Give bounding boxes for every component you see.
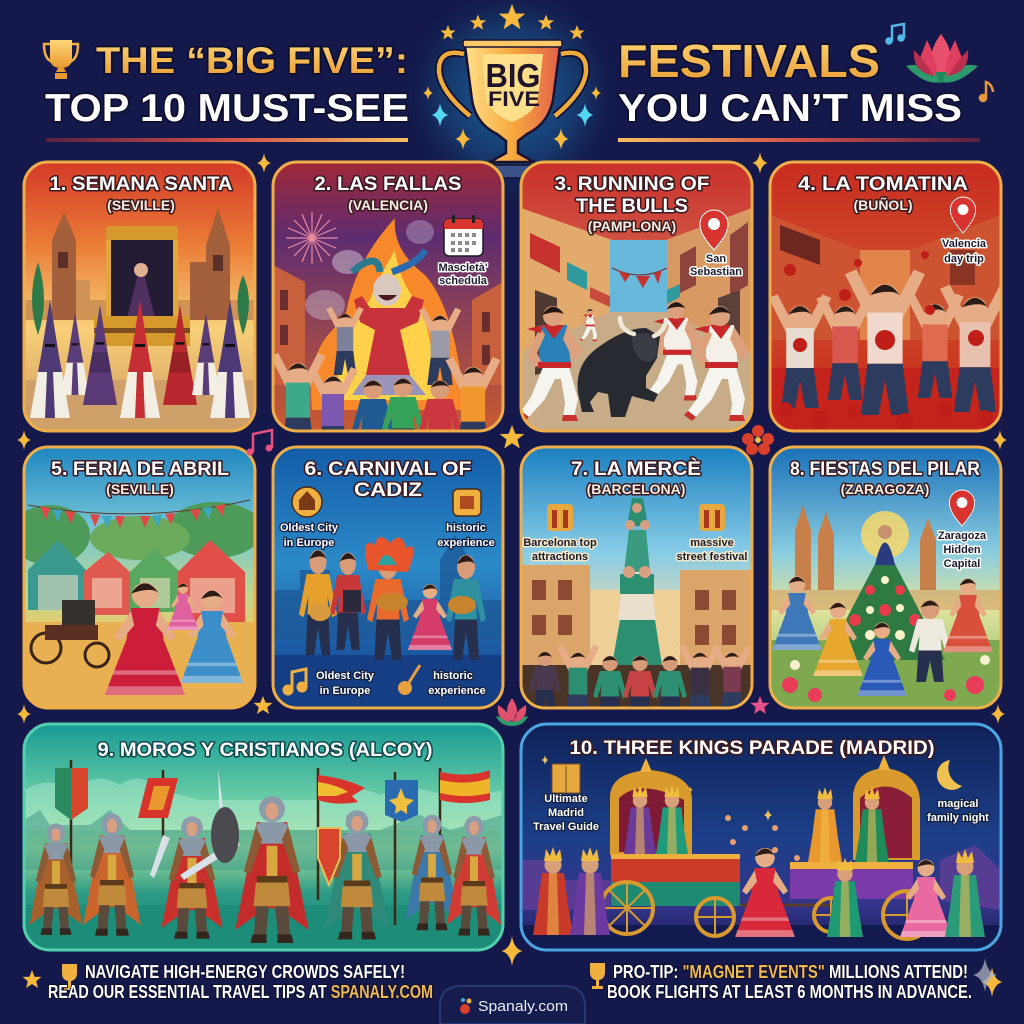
icon: crescent moon [937,760,962,790]
scene: human tower [521,447,752,722]
runners [580,309,598,341]
scene: street and bull [517,162,752,431]
title left [44,40,409,142]
footer line 3: PRO-TIP: "MAGNET EVENTS" MILLIONS ATTEND! [613,962,968,982]
label: Valencia day trip: Valencia [942,238,987,250]
heading: 6. CARNIVAL OF [304,459,472,480]
label: historic experience bottom: experience [428,685,486,697]
icon: map pin [949,490,975,526]
panel: La Merce [521,447,752,722]
label: Zaragoza Hidden Capital: Zaragoza [938,530,987,542]
icon: music note orange [980,82,993,101]
label: Zaragoza Hidden Capital: Capital [944,558,980,570]
panel: Carnival of Cadiz [273,447,503,708]
trophy text BIG: BIG [486,57,540,94]
icon: map pin [700,210,728,250]
sparkles around trophy [423,86,601,150]
label: Valencia day trip [942,238,987,265]
label: magical family night: family night [927,812,989,824]
icon: calendar badge [453,489,481,516]
stars above trophy [440,4,585,39]
label: massive street festival: street festival [677,551,747,563]
heading line 2: THE BULLS [576,196,688,217]
subheading: (PAMPLONA) [588,218,676,234]
decorative stars between panels [17,152,1007,966]
icon: small trophy [44,40,78,79]
label: Oldest City bottom [316,670,375,697]
walls [521,208,612,352]
label: Mascleta schedule: schedula [439,275,488,287]
footer right [590,958,1002,1002]
icon: trophy right footer [590,963,605,989]
label: Mascleta schedule: Mascletà' [438,262,488,274]
label: massive street festival: massive [690,537,734,549]
icon: festival badge [699,504,725,531]
label: historic experience top [437,522,495,549]
heading: 3. RUNNING OF [554,174,710,195]
icon: towers badge [547,504,573,531]
label: magical family night [927,798,989,824]
bull [578,328,660,417]
label: Barcelona top attractions [523,537,597,563]
label: Oldest City top [280,522,339,549]
label: Barcelona top attractions: attractions [532,551,588,563]
scene: tomato fight [769,162,1010,431]
label: Barcelona top attractions: Barcelona top [523,537,597,549]
label: historic experience bottom: historic [433,670,473,682]
trophy [423,4,601,178]
subheading: (VALENCIA) [348,197,428,213]
scene: flower offering [770,447,1001,708]
icon: calendar [444,215,483,256]
subheading: (SEVILLE) [107,197,175,213]
label: massive street festival [677,537,747,563]
brand badge [440,986,585,1024]
icon: brand logo [460,998,472,1014]
label: Ultimate Madrid Travel Guide [533,793,599,833]
heading: 1. SEMANA SANTA [50,174,233,195]
icon: book [552,764,580,793]
subheading: (SEVILLE) [106,481,174,497]
footer line 2: READ OUR ESSENTIAL TRAVEL TIPS AT SPANALY.COM [48,982,433,1002]
icon: map pin [950,197,976,233]
scene: fair tents and dancers [26,448,254,706]
label: Oldest City top: Oldest City [280,522,339,534]
panel: Moros y Cristianos [24,724,503,950]
label: San Sebastian: San [706,253,726,265]
sky gap [610,240,667,312]
title line 2 right: YOU CAN’T MISS [618,87,962,130]
label: Mascleta schedule [438,262,488,287]
label: Ultimate Madrid Travel Guide: Ultimate [544,793,588,805]
icon: music note blue [886,24,904,44]
left float [601,758,740,936]
trophy label [482,54,543,122]
heading: 2. LAS FALLAS [314,174,462,195]
scene: carnival band [273,447,503,708]
panel: Three Kings Parade [521,724,1001,950]
balconies [530,233,560,273]
label: Zaragoza Hidden Capital: Hidden [943,544,981,556]
label: Ultimate Madrid Travel Guide: Madrid [548,807,584,819]
street [521,312,752,431]
panel: Las Fallas [270,162,503,462]
heading: 7. LA MERCÈ [571,458,701,480]
icon: lotus [906,34,978,84]
footer left [22,962,433,1002]
heading: 8. FIESTAS DEL PILAR [790,459,980,480]
label: San Sebastian: Sebastian [690,266,742,278]
heading: 9. MOROS Y CRISTIANOS (ALCOY) [98,740,432,761]
heading line 2: CADIZ [354,480,422,501]
label: San Sebastian [690,253,742,278]
glow behind trophy [397,0,627,210]
label: Oldest City top: in Europe [284,537,334,549]
trophy text FIVE: FIVE [488,88,540,111]
panel: Semana Santa [24,162,255,431]
scene: knights and banners [24,724,503,950]
label: historic experience top: experience [437,537,495,549]
panel: Feria de Abril [10,447,263,708]
title line 2 left: TOP 10 MUST-SEE [45,87,409,130]
knights [29,823,83,935]
scene: fire and puppets [274,164,502,430]
heading: 10. THREE KINGS PARADE (MADRID) [570,738,934,759]
right float [740,755,931,939]
subheading: (BARCELONA) [587,481,685,497]
label: historic experience bottom [428,670,486,697]
icon: cathedral badge [292,487,322,517]
footer line 1: NAVIGATE HIGH-ENERGY CROWDS SAFELY! [85,962,405,982]
title right [618,24,993,142]
label: Oldest City bottom: Oldest City [316,670,375,682]
scene: Seville procession [24,162,255,431]
trophy base [477,165,547,178]
panel: Fiestas del Pilar [770,447,1001,708]
icon: guitar [398,665,420,695]
trophy cup [465,46,560,162]
label: Zaragoza Hidden Capital [938,530,987,570]
trophy handles [439,53,586,116]
heading: 4. LA TOMATINA [798,174,968,195]
title line 1 left: THE “BIG FIVE”: [96,40,408,81]
icon: trophy left footer [62,964,77,990]
panel: La Tomatina [769,162,1010,431]
label: Oldest City bottom: in Europe [320,685,370,697]
subheading: (BUÑOL) [853,196,913,213]
subheading: (ZARAGOZA) [841,481,929,497]
brand name: Spanaly.com [478,998,568,1015]
walkers [533,847,573,935]
icon: music note [284,669,306,694]
panel: Running of the Bulls [517,162,752,431]
heading: 5. FERIA DE ABRIL [51,459,229,480]
bunting [612,268,667,275]
label: Ultimate Madrid Travel Guide: Travel Guide [533,821,599,833]
flying sweets [725,815,800,861]
label: magical family night: magical [938,798,978,810]
title line 1 right: FESTIVALS [618,35,880,87]
label: Valencia day trip: day trip [944,253,984,265]
scene: royal floats [521,724,1001,950]
banners [55,760,490,925]
label: historic experience top: historic [446,522,486,534]
